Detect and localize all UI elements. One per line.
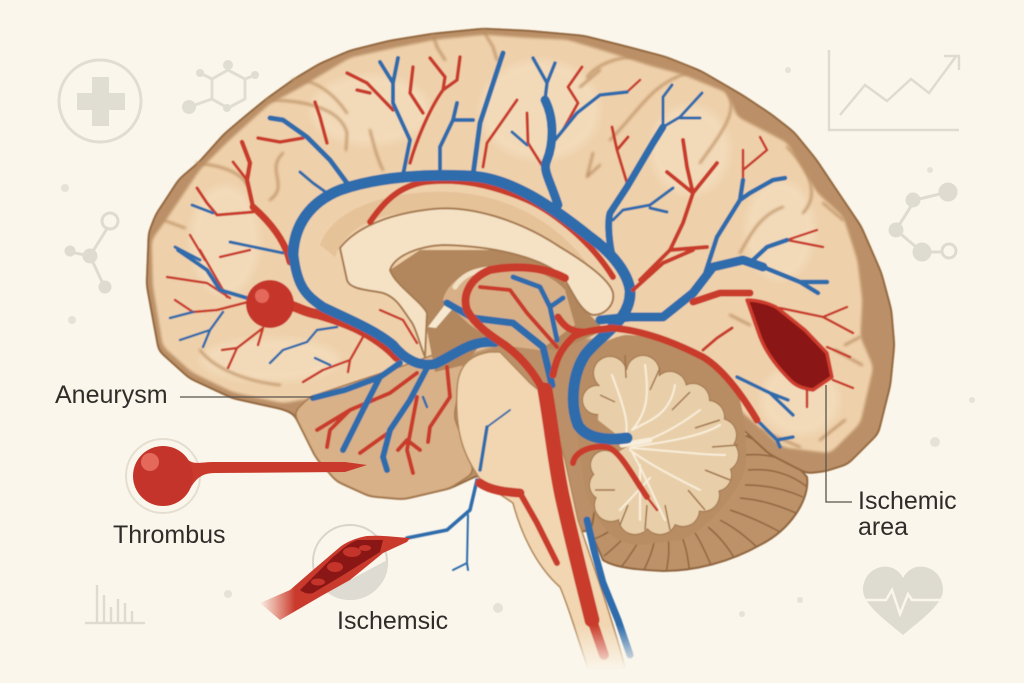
label: aneurysm: Aneurysm <box>55 381 168 409</box>
brain folds <box>163 30 862 447</box>
cerebellum surround <box>572 335 746 545</box>
icon: molecule left <box>66 213 118 292</box>
cerebellum base <box>590 420 807 574</box>
icon: hexagon molecule <box>182 60 259 114</box>
cerebrum outer rim <box>148 30 893 530</box>
temporal lobe <box>295 345 473 498</box>
corpus callosum <box>340 208 613 357</box>
label: ischemsic: Ischemsic <box>337 607 448 635</box>
stem fade <box>555 625 645 670</box>
icon: bar chart <box>85 585 145 623</box>
icon: molecule right <box>890 184 956 260</box>
red main vessels <box>466 250 757 655</box>
thalamus <box>443 266 575 350</box>
cingulate band shading <box>320 192 605 302</box>
central deep region <box>390 250 605 372</box>
icon: line chart <box>829 50 959 130</box>
label: ischemic area <box>826 385 957 541</box>
thrombus vessel <box>126 439 367 513</box>
brainstem <box>457 352 625 668</box>
brain artwork <box>148 30 893 668</box>
label: thrombus: Thrombus <box>113 521 226 549</box>
label: ischemic area: Ischemic <box>858 487 957 515</box>
cerebellum arbor <box>582 355 739 535</box>
blue vessels <box>170 53 827 570</box>
cerebrum gyri surface <box>152 35 873 453</box>
spinal blue vessel <box>587 520 630 655</box>
ischemic vessel <box>260 525 410 620</box>
decorative dots <box>61 67 975 617</box>
icon: heart <box>863 567 943 635</box>
ischemic area lesion <box>747 300 853 407</box>
fornix wedge <box>428 302 455 328</box>
label: ischemic area: area <box>858 513 908 541</box>
red vessels behind <box>167 57 823 473</box>
aneurysm <box>246 280 294 328</box>
gyri lights <box>190 60 840 435</box>
icon: medical cross <box>59 60 141 142</box>
